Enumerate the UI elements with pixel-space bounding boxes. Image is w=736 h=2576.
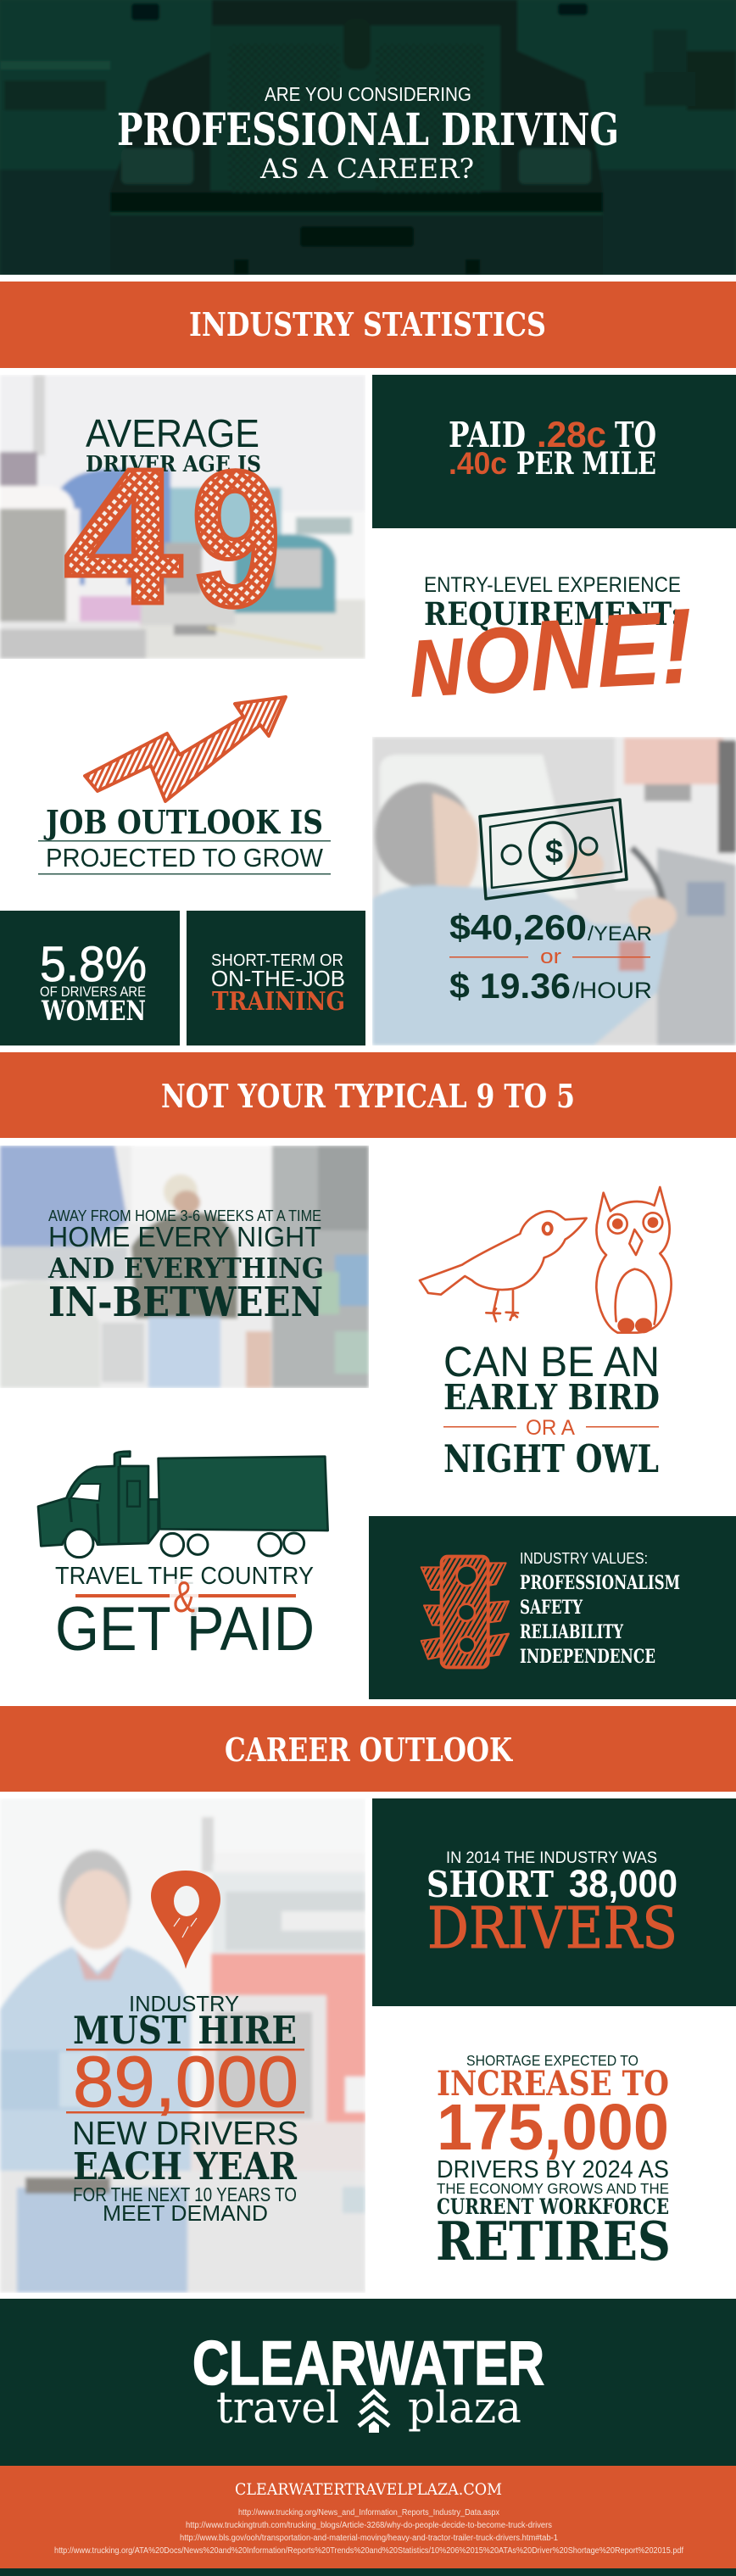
panel: pay per mile: TO bbox=[615, 415, 656, 455]
panel: short 38,000 drivers: DRIVERS bbox=[427, 1895, 677, 1961]
panel: short 38,000 drivers bbox=[372, 1798, 736, 2006]
caption: IN-BETWEEN bbox=[48, 1279, 323, 1326]
panel: shortage increase: THE ECONOMY GROWS AND THE bbox=[437, 2180, 669, 2197]
caption: & bbox=[173, 1573, 195, 1622]
panel: short 38,000 drivers: 38,000 bbox=[569, 1862, 677, 1905]
hero title: AS A CAREER? bbox=[259, 153, 474, 185]
values list: INDEPENDENCE bbox=[520, 1646, 655, 1668]
icon: location pin bbox=[151, 1871, 220, 1969]
values list: INDUSTRY VALUES: bbox=[520, 1550, 648, 1567]
footer logo panel bbox=[0, 2299, 736, 2466]
panel: pay per mile: PAID bbox=[449, 415, 526, 455]
wage figures: /YEAR bbox=[588, 923, 652, 945]
wage figures: or bbox=[540, 945, 561, 968]
icon: truck bbox=[38, 1452, 328, 1558]
panel: salary bbox=[372, 737, 736, 1045]
section banner: industry statistics: INDUSTRY STATISTICS bbox=[189, 305, 546, 343]
panel: training: TRAINING bbox=[212, 987, 345, 1017]
panel: training: ON-THE-JOB bbox=[211, 966, 345, 991]
panel: shortage increase bbox=[436, 2052, 671, 2272]
caption bbox=[443, 1338, 660, 1481]
photo: driver at the wheel bbox=[372, 737, 736, 1045]
panel: entry-level experience: ENTRY-LEVEL EXPERIENCE bbox=[424, 573, 681, 597]
panel: home every night bbox=[0, 1146, 369, 1388]
photo: driver fuelling bbox=[0, 1146, 369, 1388]
values list bbox=[520, 1550, 680, 1668]
icon: rising arrow bbox=[85, 697, 286, 801]
caption: GET PAID bbox=[55, 1595, 315, 1664]
heading bbox=[86, 411, 261, 477]
panel: pay per mile bbox=[372, 375, 736, 528]
hero title bbox=[117, 83, 619, 185]
caption: AND EVERYTHING bbox=[47, 1252, 324, 1285]
panel: shortage increase: INCREASE TO bbox=[437, 2064, 669, 2104]
panel: shortage increase: CURRENT WORKFORCE bbox=[437, 2194, 669, 2219]
wage figures: $40,260 bbox=[449, 907, 587, 947]
panel: training bbox=[187, 911, 365, 1045]
section banner: industry statistics bbox=[0, 282, 736, 368]
panel: entry-level experience bbox=[405, 573, 696, 720]
icon: owl bbox=[596, 1187, 672, 1333]
values list: RELIABILITY bbox=[520, 1621, 623, 1643]
caption: HOME EVERY NIGHT bbox=[48, 1221, 321, 1252]
panel: pay per mile: PER MILE bbox=[516, 446, 656, 482]
photo: parked trucks bbox=[0, 375, 365, 659]
hiring figures: INDUSTRY bbox=[129, 1991, 239, 2016]
panel: shortage increase: DRIVERS BY 2024 AS bbox=[437, 2156, 669, 2183]
hiring figures: 89,000 bbox=[73, 2042, 298, 2122]
heading: DRIVER AGE IS bbox=[86, 452, 261, 477]
panel: women drivers: OF DRIVERS ARE bbox=[40, 984, 146, 1000]
footer sources panel: http://www.trucking.org/News_and_Information_Reports_Industry_Data.aspx bbox=[238, 2508, 499, 2517]
caption: OR A bbox=[526, 1416, 575, 1440]
panel: travel the country bbox=[38, 1452, 328, 1664]
number 49 bbox=[64, 429, 282, 647]
values list: PROFESSIONALISM bbox=[520, 1572, 680, 1594]
panel: industry must hire bbox=[0, 1798, 365, 2293]
icon: banknote: $ bbox=[545, 834, 563, 870]
caption bbox=[55, 1563, 315, 1664]
caption bbox=[47, 1207, 324, 1326]
footer logo panel: travel bbox=[216, 2384, 339, 2434]
footer sources panel: http://www.trucking.org/ATA%20Docs/News%20and%20Information/Reports%20Trends%20and%20Statistics/10%206%2015%20ATAs%20Driver%20Shortage%20Report%202015.pdf bbox=[54, 2546, 683, 2556]
hiring figures: EACH YEAR bbox=[73, 2145, 297, 2188]
icon: bird bbox=[420, 1211, 587, 1321]
panel: short 38,000 drivers: IN 2014 THE INDUSTRY WAS bbox=[446, 1849, 657, 1867]
icon: traffic light bbox=[421, 1557, 509, 1667]
panel: entry-level experience: REQUIREMENT: bbox=[424, 595, 681, 633]
number 49: 4 bbox=[64, 429, 182, 644]
icon: logo chevrons bbox=[359, 2391, 389, 2433]
panel: women drivers: WOMEN bbox=[41, 995, 146, 1027]
panel: early bird or night owl bbox=[420, 1187, 672, 1481]
panel: shortage increase: 175,000 bbox=[437, 2091, 669, 2164]
caption: NIGHT OWL bbox=[443, 1436, 659, 1481]
hero panel with truck photo bbox=[0, 0, 736, 275]
hiring figures: MEET DEMAND bbox=[103, 2200, 268, 2226]
hiring figures: MUST HIRE bbox=[73, 2008, 297, 2053]
footer logo panel: CLEARWATER bbox=[192, 2329, 544, 2398]
panel: shortage increase: SHORTAGE EXPECTED TO bbox=[466, 2052, 638, 2069]
wage figures: $ 19.36 bbox=[449, 966, 571, 1006]
panel: job outlook: JOB OUTLOOK IS bbox=[43, 803, 323, 841]
hero title: ARE YOU CONSIDERING bbox=[265, 83, 471, 105]
caption: TRAVEL THE COUNTRY bbox=[55, 1563, 314, 1590]
wage figures: /HOUR bbox=[572, 978, 652, 1003]
hiring figures bbox=[66, 1991, 304, 2226]
footer sources panel bbox=[0, 2466, 736, 2568]
hand-lettered none: NONE! bbox=[405, 586, 696, 720]
section banner: not your typical 9 to 5: NOT YOUR TYPICAL 9 TO 5 bbox=[161, 1077, 575, 1115]
panel: pay per mile: .40c bbox=[449, 446, 507, 481]
panel: women drivers bbox=[0, 911, 180, 1045]
panel: women drivers: 5.8% bbox=[40, 937, 147, 992]
caption: CAN BE AN bbox=[443, 1338, 660, 1386]
values list: SAFETY bbox=[520, 1597, 583, 1619]
heading: AVERAGE bbox=[86, 411, 259, 455]
caption: AWAY FROM HOME 3-6 WEEKS AT A TIME bbox=[48, 1207, 321, 1224]
footer sources panel: CLEARWATERTRAVELPLAZA.COM bbox=[235, 2480, 502, 2499]
wage figures bbox=[449, 907, 652, 1006]
section banner: career outlook bbox=[0, 1706, 736, 1792]
hiring figures: FOR THE NEXT 10 YEARS TO bbox=[73, 2183, 297, 2205]
panel: average driver age bbox=[0, 375, 365, 659]
number 49: 9 bbox=[191, 432, 282, 647]
panel: job outlook bbox=[38, 697, 331, 875]
footer logo panel: plaza bbox=[408, 2384, 521, 2434]
footer sources panel: http://www.bls.gov/ooh/transportation-and-material-moving/heavy-and-tractor-trailer-truck-drivers.htm#tab-1 bbox=[180, 2534, 558, 2543]
photo: smiling driver and red truck bbox=[0, 1798, 365, 2293]
panel: industry values bbox=[369, 1516, 736, 1699]
panel: job outlook: PROJECTED TO GROW bbox=[46, 843, 324, 873]
section banner: not your typical 9 to 5 bbox=[0, 1052, 736, 1138]
footer sources panel: http://www.truckingtruth.com/trucking_blogs/Article-3268/why-do-people-decide-to-become-truck-drivers bbox=[186, 2521, 552, 2530]
bottom edge band bbox=[0, 2568, 736, 2576]
panel: shortage increase: RETIRES bbox=[436, 2210, 671, 2272]
panel: pay per mile: .28c bbox=[537, 415, 606, 455]
section banner: career outlook: CAREER OUTLOOK bbox=[225, 1731, 514, 1769]
icon: banknote bbox=[480, 800, 627, 899]
panel: short 38,000 drivers: SHORT bbox=[427, 1864, 554, 1905]
hiring figures: NEW DRIVERS bbox=[72, 2116, 298, 2152]
panel: training: SHORT-TERM OR bbox=[211, 951, 343, 970]
caption: EARLY BIRD bbox=[443, 1377, 660, 1418]
